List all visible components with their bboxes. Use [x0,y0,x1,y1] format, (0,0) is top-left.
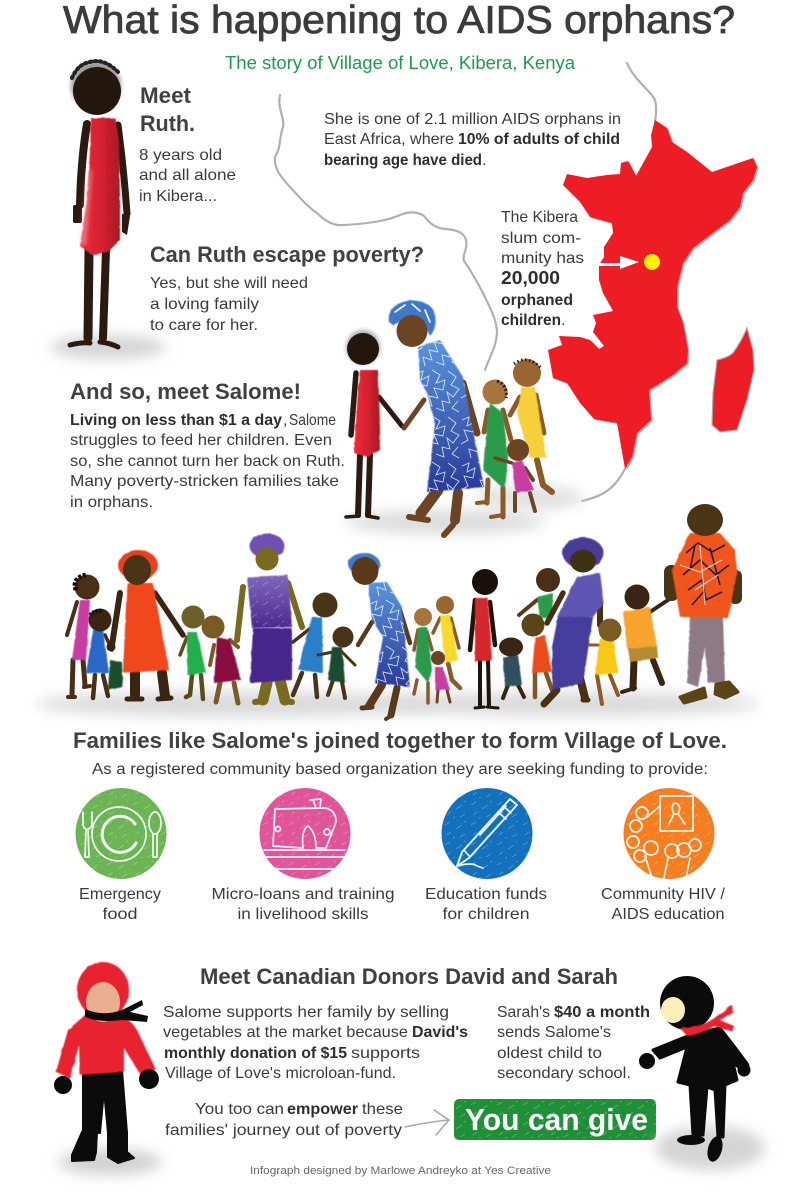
text: call to action: these [362,1101,403,1118]
pink child 3 [431,651,450,702]
Ruth small [346,330,402,518]
purple woman 2 [544,538,604,704]
subheading: funding: As a registered community based organization they are seeking funding to provide: [92,761,708,778]
green child [477,380,511,517]
figure: David [54,962,162,1175]
panel: And so, meet Salome: , [283,412,287,429]
panel: Kibera statistic: 20,000 [501,268,560,288]
panel: Meet Ruth text: in Kibera... [139,188,217,205]
figures: Ruth meets Salome and her children [345,300,585,535]
panel: Can Ruth escape poverty: Can Ruth escape poverty? [150,242,424,267]
text: Sarah donation: sends Salome's [497,1024,611,1041]
panel: Meet Ruth text: Meet [140,83,192,108]
East Africa region [548,120,757,469]
text: Sarah donation: secondary school. [497,1065,631,1082]
text: David donation: David's [412,1024,468,1041]
button: You can give: You can give [465,1102,648,1137]
illustration: village family group [35,504,760,719]
panel: AIDS orphans statistic: East Africa, where [324,131,454,148]
yellow child 3 [433,596,460,688]
panel: Kibera statistic [501,209,584,329]
label: micro-loans: Micro-loans and training [212,886,394,903]
text: David donation: supports [351,1045,420,1062]
text: call to action: families' journey out of poverty [165,1122,402,1139]
panel: And so, meet Salome: Many poverty-stricken families take [70,473,339,490]
panel: Meet Ruth text: Ruth. [140,111,195,136]
panel: Can Ruth escape poverty [150,242,424,334]
dark child [318,626,355,698]
yellow kid 2 [589,618,622,704]
text: David donation: vegetables at the market because [163,1024,408,1041]
blue child [86,608,112,698]
panel: Kibera statistic: munity has [501,250,584,267]
panel: Kibera statistic: The Kibera [501,209,578,226]
panel: Kibera statistic: . [561,312,565,329]
green child 3 [414,608,432,703]
label: emergency food: Emergency [79,886,161,903]
continent outline strokes [275,63,656,501]
label: micro-loans [212,886,394,923]
text: Sarah donation: Sarah's [497,1004,550,1021]
Salome in group [348,553,410,719]
Madagascar [712,328,754,432]
map of East Africa [275,63,759,501]
green child 2 [180,606,206,699]
text: Sarah donation: $40 a month [554,1004,650,1021]
heading: Meet Canadian Donors: Meet Canadian Donors David and Sarah [200,964,618,989]
panel: And so, meet Salome: Living on less than $1 a day [70,412,282,429]
panel: Kibera statistic: slum com- [501,230,581,247]
orange-yellow kid [622,584,668,692]
panel: AIDS orphans statistic: 10% of adults of child [458,131,620,148]
panel: AIDS orphans statistic: . [482,152,486,169]
panel: Meet Ruth text [139,83,236,205]
panel: And so, meet Salome: And so, meet Salome! [70,379,301,404]
text: call to action: empower [287,1101,358,1118]
icon: community HIV education [624,788,714,879]
panel: AIDS orphans statistic: bearing age have died [324,152,482,169]
dark green small child [108,660,123,690]
panel: Can Ruth escape poverty: a loving family [150,296,259,313]
label: community education [601,886,726,923]
text: Sarah donation [497,1004,650,1082]
text: David donation [163,1004,468,1082]
orange kid [522,614,552,697]
text: call to action [165,1101,403,1139]
panel: And so, meet Salome: struggles to feed her children. Even [70,432,332,449]
icon: pencil education [442,788,532,879]
label: emergency food: food [102,906,138,923]
title: What is happening to AIDS orphans? [63,0,735,42]
panel: AIDS orphans statistic: She is one of 2.1 million AIDS orphans in [324,111,621,128]
text: Sarah donation: oldest child to [497,1045,602,1062]
figure: Ruth large [50,61,166,359]
panel: And so, meet Salome: so, she cannot turn her back on Ruth. [70,453,345,470]
tall man [664,504,742,703]
heading: Families like Salome's: Families like Salome's joined together to form Village of Love. [73,728,727,753]
text: David donation: Village of Love's microloan-fund. [165,1065,396,1082]
label: community education: Community HIV / [601,886,726,903]
text: David donation: Salome supports her family by selling [163,1004,449,1021]
panel: And so, meet Salome: Salome [289,412,336,429]
pink girl [67,574,100,697]
panel: And so, meet Salome [70,379,345,511]
panel: Can Ruth escape poverty: to care for her. [150,317,258,334]
panel: Kibera statistic: children [501,312,561,329]
blue child 2 [293,592,338,697]
Ruth in group [470,569,498,708]
text: David donation: monthly donation of $15 [164,1045,347,1062]
label: micro-loans: in livelihood skills [238,906,368,923]
maroon child [202,616,241,703]
Salome small [389,300,484,535]
subtitle: The story of Village of Love, Kibera, Kenya [225,53,576,73]
figure: Sarah [639,976,765,1170]
pink child [495,439,535,511]
label: education funds: Education funds [425,886,547,903]
panel: Kibera statistic: orphaned [501,292,573,309]
panel: Can Ruth escape poverty: Yes, but she will need [150,275,308,292]
panel: And so, meet Salome: in orphans. [70,494,153,511]
Kibera location dot [644,254,660,270]
label: education funds: for children [442,906,530,923]
text: call to action: You too can [195,1101,284,1118]
green back child [519,568,560,618]
arrow to Kibera [599,256,639,269]
panel: Meet Ruth text: 8 years old [139,147,222,164]
purple woman [237,534,302,702]
panel: AIDS orphans statistic [324,111,621,169]
orange dress woman [106,550,183,699]
icon: sewing machine [260,788,350,879]
map shadow [550,121,759,470]
arrow to button [405,1110,449,1135]
grey-blue child [499,638,524,698]
label: community education: AIDS education [612,906,724,923]
footer credit: Infograph designed by Marlowe Andreyko at Yes Creative [250,1165,551,1177]
label: education funds [425,886,547,923]
label: emergency food [79,886,161,923]
panel: Meet Ruth text: and all alone [139,167,236,184]
yellow child [510,359,552,492]
icon: emergency food [76,788,166,879]
